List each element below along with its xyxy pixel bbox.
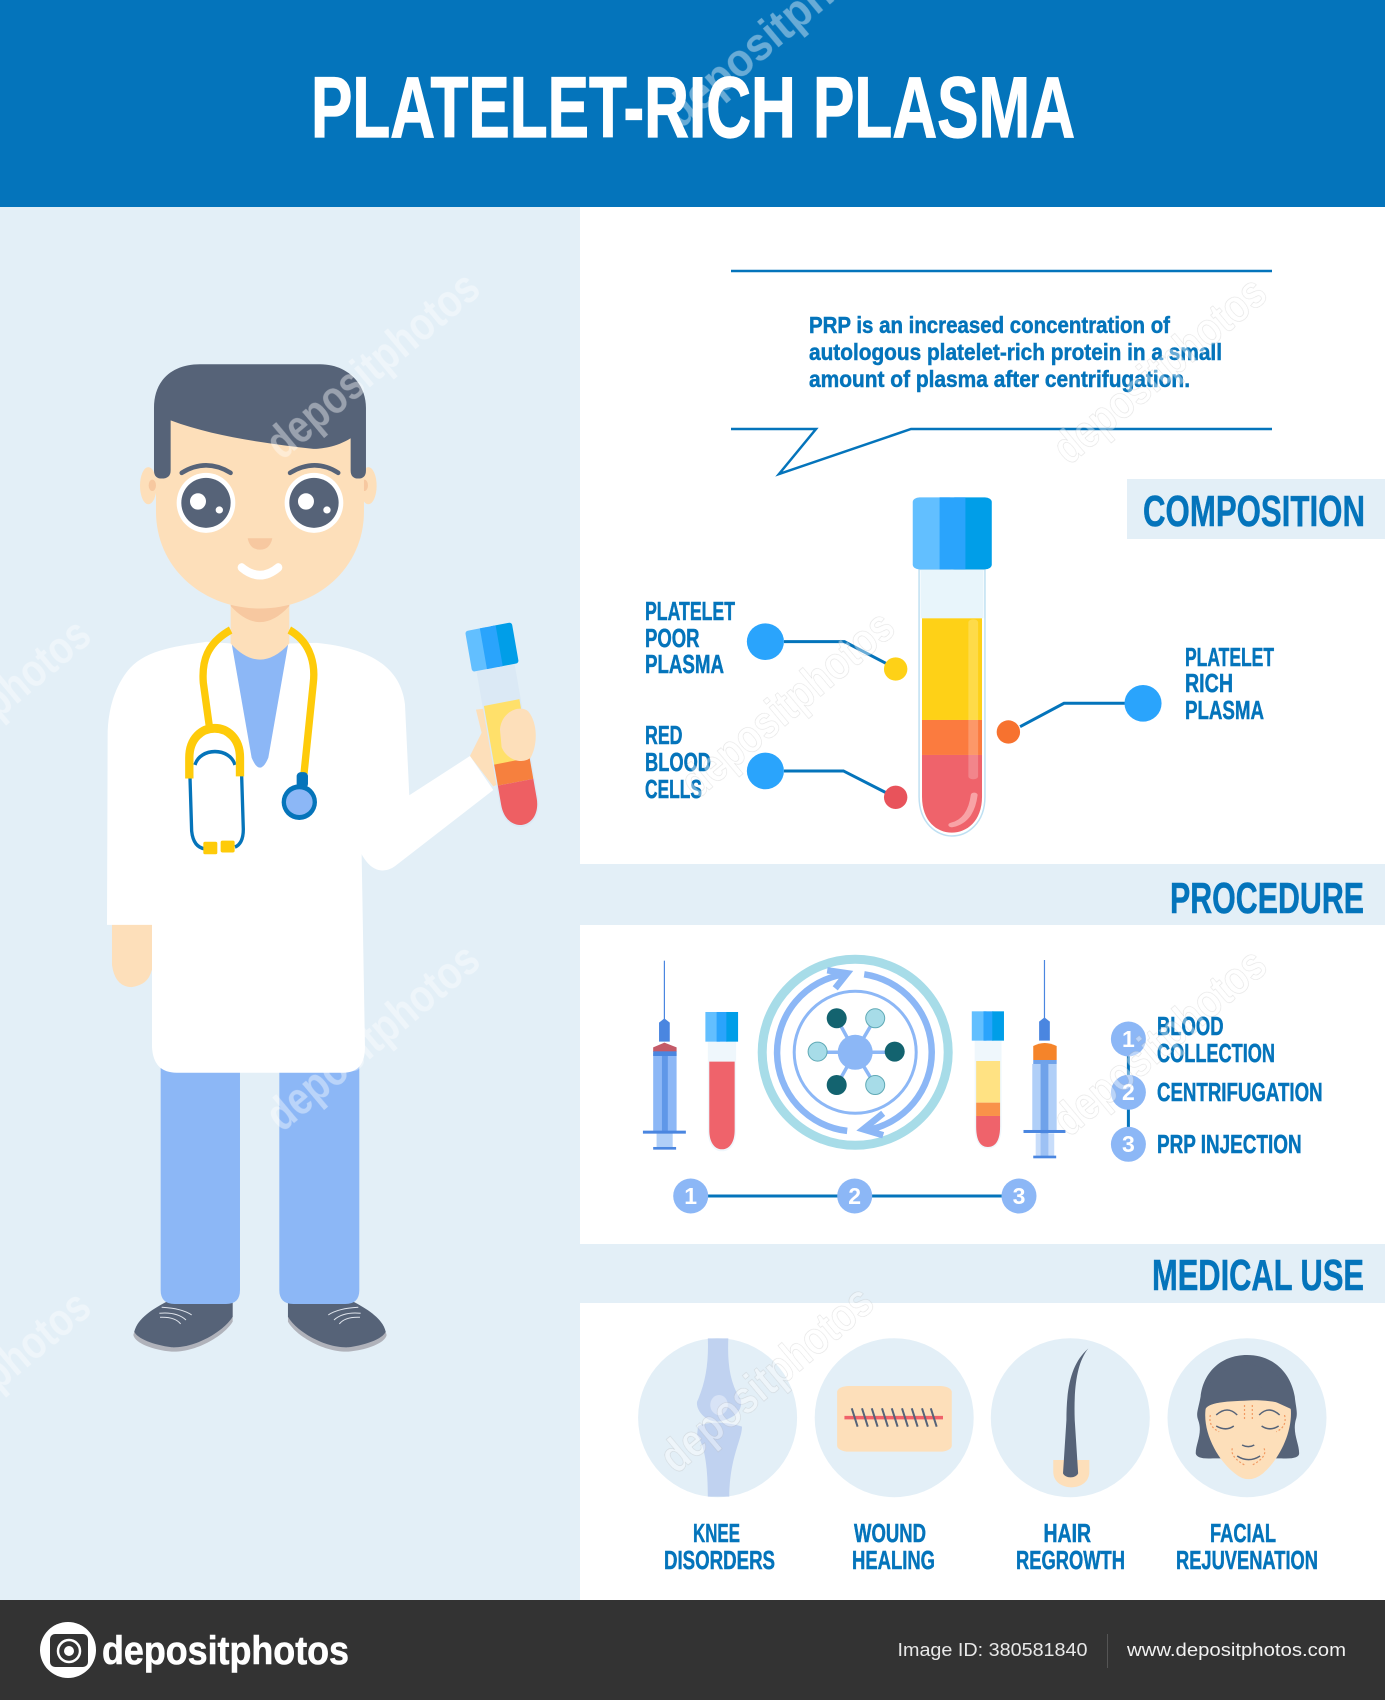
- label: hair regrowth: [1016, 1518, 1125, 1575]
- label: platelet poor plasma: PLASMA: [645, 649, 724, 679]
- stethoscope: [189, 630, 317, 854]
- shirt: [232, 644, 288, 768]
- hair: [154, 364, 366, 479]
- speech bubble with definition: [731, 271, 1272, 474]
- centrifuge diagram: [762, 959, 948, 1145]
- neck shadow: [231, 604, 289, 622]
- neck: [231, 601, 289, 660]
- icon: woman's face: [1196, 1355, 1299, 1479]
- icon: hair follicle: [1053, 1348, 1089, 1487]
- step list: BLOOD: [1157, 1011, 1224, 1041]
- doctor illustration: [107, 364, 547, 1352]
- eyebrows: [182, 465, 338, 473]
- label: hair regrowth: HAIR: [1044, 1518, 1091, 1548]
- nose: [248, 538, 272, 550]
- label: platelet poor plasma: [645, 596, 735, 679]
- step timeline: 1: [684, 1183, 697, 1209]
- heading: procedure: [580, 864, 1385, 925]
- label: facial rejuvenation: [1176, 1518, 1318, 1575]
- speech bubble with definition: autologous platelet-rich protein in a small: [809, 339, 1222, 365]
- left eye: [177, 473, 235, 533]
- watermarks: depositphotos: [670, 599, 904, 808]
- step list: 1: [1122, 1026, 1135, 1052]
- label: knee disorders: [664, 1518, 775, 1575]
- label: platelet poor plasma: POOR: [645, 623, 700, 653]
- footer bar: [0, 1600, 1385, 1700]
- medical use circles: [638, 1338, 1326, 1497]
- medical use icons: [697, 1338, 1299, 1497]
- label: platelet poor plasma: PLATELET: [645, 596, 735, 626]
- label: red blood cells: CELLS: [645, 774, 702, 804]
- title banner: [0, 0, 1385, 207]
- heading: medical use: [580, 1244, 1385, 1303]
- step timeline: 2: [848, 1183, 861, 1209]
- holding fingers: [500, 709, 536, 761]
- label: platelet rich plasma: [1185, 642, 1274, 725]
- trousers: [161, 1063, 359, 1304]
- speech bubble with definition: PRP is an increased concentration of: [809, 312, 1170, 338]
- step list: 3: [1122, 1131, 1135, 1157]
- white coat: [107, 642, 493, 1073]
- callout: platelet poor plasma: [747, 623, 907, 681]
- label: facial rejuvenation: REJUVENATION: [1176, 1545, 1318, 1575]
- watermarks: depositphotos: [1042, 937, 1276, 1146]
- watermarks: depositphotos: [1042, 265, 1276, 474]
- icon: stitched wound: [837, 1386, 952, 1452]
- watermarks: depositphotos: [255, 260, 489, 469]
- test tube: separated plasma: [972, 1011, 1004, 1149]
- step list: CENTRIFUGATION: [1157, 1077, 1323, 1107]
- label: red blood cells: [645, 720, 711, 804]
- test tube: whole blood: [705, 1012, 738, 1151]
- step list: PRP INJECTION: [1157, 1129, 1302, 1159]
- label: platelet rich plasma: PLATELET: [1185, 642, 1274, 672]
- watermarks: depositphotos: [255, 932, 489, 1141]
- head: [156, 404, 364, 609]
- left hand: [112, 922, 160, 987]
- callout: platelet rich plasma: [997, 685, 1162, 744]
- speech bubble with definition: amount of plasma after centrifugation.: [809, 366, 1190, 392]
- ears: [140, 467, 377, 504]
- icon: knee joint: [697, 1338, 742, 1497]
- right eye: [285, 473, 343, 533]
- syringe: blood collection: [643, 961, 686, 1150]
- label: knee disorders: DISORDERS: [664, 1545, 775, 1575]
- label: hair regrowth: REGROWTH: [1016, 1545, 1125, 1575]
- syringe: PRP injection: [1023, 960, 1065, 1158]
- footer bar: depositphotos: [102, 1629, 349, 1673]
- label: wound healing: WOUND: [854, 1518, 926, 1548]
- watermarks: depositphotos: [649, 1274, 883, 1483]
- step list: [1111, 1011, 1323, 1162]
- label: platelet rich plasma: PLASMA: [1185, 695, 1264, 725]
- left shoe: [133, 1300, 233, 1352]
- held test tube: [465, 622, 547, 831]
- label: facial rejuvenation: FACIAL: [1210, 1518, 1276, 1548]
- right shoe: [288, 1300, 387, 1352]
- footer bar: www.depositphotos.com: [1126, 1639, 1346, 1660]
- label: red blood cells: RED: [645, 720, 682, 750]
- label: wound healing: [852, 1518, 935, 1575]
- step timeline: [673, 1178, 1036, 1214]
- step list: 2: [1122, 1079, 1135, 1105]
- left panel background: [0, 207, 580, 1600]
- label: wound healing: HEALING: [852, 1545, 935, 1575]
- label: red blood cells: BLOOD: [645, 747, 711, 777]
- footer bar: Image ID: 380581840: [898, 1639, 1088, 1660]
- callout: red blood cells: [747, 753, 907, 809]
- label: knee disorders: KNEE: [693, 1518, 740, 1548]
- title banner: PLATELET-RICH PLASMA: [311, 60, 1075, 156]
- big test tube: [913, 497, 992, 836]
- procedure illustrations: [643, 960, 1065, 1158]
- hand behind tube: [470, 708, 508, 786]
- step list: COLLECTION: [1157, 1038, 1275, 1068]
- step timeline: 3: [1013, 1183, 1025, 1209]
- smile: [242, 567, 278, 575]
- label: platelet rich plasma: RICH: [1185, 668, 1233, 698]
- composition test tube diagram: [747, 497, 1162, 836]
